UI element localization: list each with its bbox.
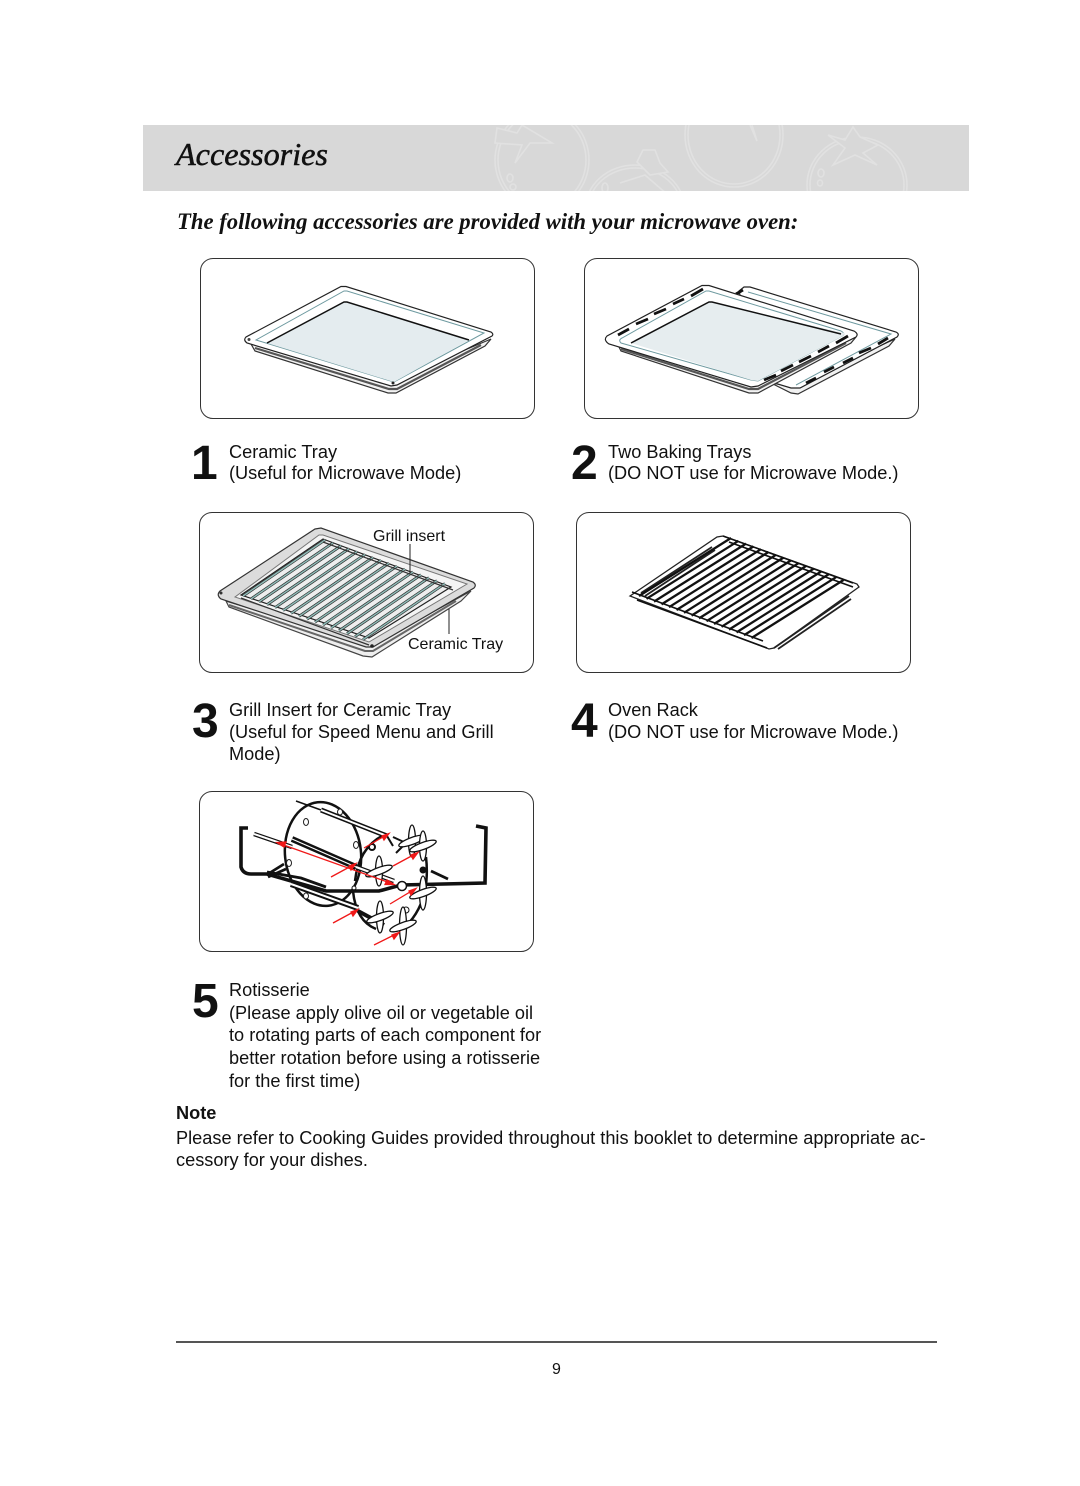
left disc (280, 798, 366, 910)
frame (241, 826, 486, 891)
number 3: 3 (192, 695, 219, 748)
caption 3: (Useful for Speed Menu and Grill (229, 722, 494, 742)
caption 1 (229, 442, 461, 483)
number 1: 1 (191, 437, 218, 490)
number 5: 5 (192, 975, 219, 1028)
panel: rotisserie illustration (199, 791, 534, 952)
header banner (143, 125, 969, 191)
caption 5: for the first time) (229, 1071, 360, 1091)
panel: ceramic tray illustration (200, 258, 535, 419)
caption 4: Oven Rack (608, 700, 698, 720)
number 4: 4 (571, 695, 598, 748)
caption 5: (Please apply olive oil or vegetable oil (229, 1003, 533, 1023)
caption 2 (608, 442, 898, 483)
page number: 9 (552, 1361, 561, 1378)
caption 5: to rotating parts of each component for (229, 1025, 541, 1045)
label: grill insert: Grill insert (373, 528, 445, 545)
caption 5: Rotisserie (229, 980, 310, 1000)
caption 3: Grill Insert for Ceramic Tray (229, 700, 451, 720)
front tray (605, 286, 857, 393)
note text (176, 1128, 926, 1170)
number 2: 2 (571, 437, 598, 490)
back tray (736, 287, 898, 394)
red arrows (277, 834, 418, 945)
subtitle heading: The following accessories are provided with your microwave oven: (177, 209, 798, 234)
caption 4 (608, 700, 898, 742)
caption 5: better rotation before using a rotisserie (229, 1048, 540, 1068)
banner title: Accessories (176, 136, 328, 172)
banner tomato pattern (494, 125, 908, 191)
note heading: Note (176, 1103, 216, 1123)
note text: cessory for your dishes. (176, 1150, 368, 1170)
grill rods (243, 540, 445, 640)
note text: Please refer to Cooking Guides provided throughout this booklet to determine appropriate ac- (176, 1128, 926, 1148)
caption 3 (229, 700, 494, 764)
caption 4: (DO NOT use for Microwave Mode.) (608, 722, 898, 742)
panel: grill insert illustration (199, 512, 534, 673)
caption 2: Two Baking Trays (608, 442, 751, 462)
caption 2: (DO NOT use for Microwave Mode.) (608, 463, 898, 483)
caption 3: Mode) (229, 744, 281, 764)
footer rule (176, 1341, 937, 1342)
caption 1: (Useful for Microwave Mode) (229, 463, 461, 483)
caption 1: Ceramic Tray (229, 442, 337, 462)
caption 5 (229, 980, 541, 1091)
forks (365, 825, 437, 945)
panel: oven rack illustration (576, 512, 911, 673)
panel: two baking trays illustration (584, 258, 919, 419)
right disc (352, 834, 427, 929)
spits (254, 801, 406, 925)
label: ceramic tray: Ceramic Tray (408, 636, 503, 653)
